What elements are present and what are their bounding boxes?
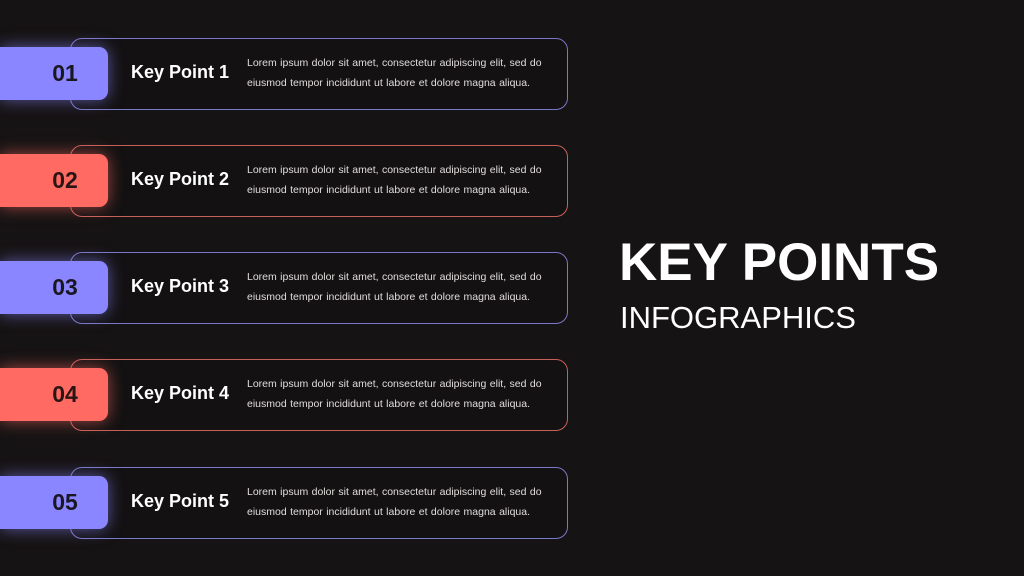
subtitle: INFOGRAPHICS — [620, 300, 856, 335]
text 2: eiusmod tempor incididunt ut labore et dolore magna aliqua. — [247, 184, 530, 196]
text 5: eiusmod tempor incididunt ut labore et dolore magna aliqua. — [247, 506, 530, 518]
tab 02 — [0, 154, 108, 207]
tab 04 — [0, 368, 108, 421]
text 2: Lorem ipsum dolor sit amet, consectetur adipiscing elit, sed do — [247, 164, 542, 176]
card 3 — [70, 252, 568, 324]
text 5: Lorem ipsum dolor sit amet, consectetur adipiscing elit, sed do — [247, 486, 542, 498]
heading 5: Key Point 5 — [131, 491, 229, 511]
tab 04: 04 — [52, 381, 78, 407]
heading 1: Key Point 1 — [131, 62, 229, 82]
row 2 — [0, 142, 568, 219]
row 1 — [0, 35, 568, 112]
tab 05: 05 — [52, 489, 78, 515]
heading 2: Key Point 2 — [131, 169, 229, 189]
tab 01 — [0, 47, 108, 100]
card 5 — [70, 467, 568, 539]
card 4 — [70, 359, 568, 431]
row 5 — [0, 464, 568, 541]
title: KEY POINTS — [619, 233, 939, 292]
tab 03 — [0, 261, 108, 314]
text 1: eiusmod tempor incididunt ut labore et dolore magna aliqua. — [247, 76, 530, 88]
heading 3: Key Point 3 — [131, 276, 229, 296]
tab 01: 01 — [52, 60, 78, 86]
text 3: Lorem ipsum dolor sit amet, consectetur adipiscing elit, sed do — [247, 271, 542, 283]
card 1 — [70, 38, 568, 110]
card 2 — [70, 145, 568, 217]
text 1: Lorem ipsum dolor sit amet, consectetur adipiscing elit, sed do — [247, 57, 542, 69]
text 3: eiusmod tempor incididunt ut labore et dolore magna aliqua. — [247, 290, 530, 302]
tab 03: 03 — [52, 274, 78, 300]
text 4: eiusmod tempor incididunt ut labore et dolore magna aliqua. — [247, 398, 530, 410]
text 2 — [247, 164, 542, 196]
text 1 — [247, 57, 542, 88]
row 3 — [0, 249, 568, 326]
row 4 — [0, 356, 568, 433]
text 3 — [247, 271, 542, 302]
tab 02: 02 — [52, 167, 78, 193]
text 4: Lorem ipsum dolor sit amet, consectetur adipiscing elit, sed do — [247, 378, 542, 390]
text 5 — [247, 486, 542, 518]
text 4 — [247, 378, 542, 410]
heading 4: Key Point 4 — [131, 383, 229, 403]
tab 05 — [0, 476, 108, 529]
